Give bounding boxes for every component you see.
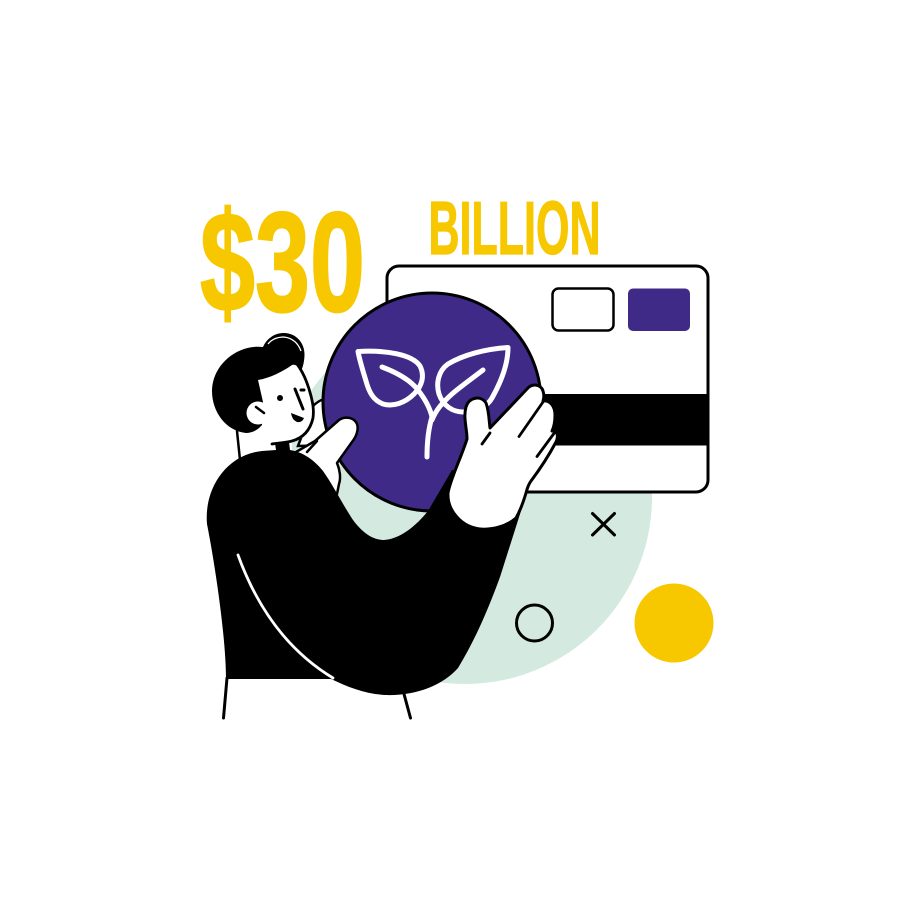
purple coin (323, 293, 541, 511)
right leaf (438, 348, 508, 412)
left leaf (358, 351, 422, 405)
hair highlight (268, 337, 301, 351)
heading: $30: $30 (200, 183, 365, 342)
face outline (272, 364, 313, 444)
thumb of left hand behind circle (298, 399, 335, 446)
sweater seam (238, 555, 333, 678)
green background circle (278, 310, 652, 684)
mouth (291, 413, 304, 422)
card outlined chip (552, 288, 614, 330)
nose and far eye (295, 389, 304, 409)
neck (237, 425, 292, 462)
heading: BILLION: BILLION (428, 186, 600, 270)
black sweater body and arm (207, 442, 527, 695)
face (245, 362, 314, 445)
plant icon (358, 348, 508, 457)
left leg (224, 678, 227, 718)
right hand (448, 385, 557, 529)
hair (212, 333, 304, 433)
card stripe (387, 394, 708, 446)
yellow circle (634, 584, 714, 662)
credit card (387, 266, 708, 492)
ear (246, 402, 270, 424)
stem and veins (382, 367, 483, 457)
person (207, 333, 557, 718)
right leg (404, 694, 410, 718)
finger lines (482, 402, 555, 456)
outlined small circle (516, 605, 552, 641)
x mark (592, 514, 614, 535)
eye (277, 395, 283, 401)
left hand (296, 418, 358, 494)
card purple chip (628, 288, 690, 331)
